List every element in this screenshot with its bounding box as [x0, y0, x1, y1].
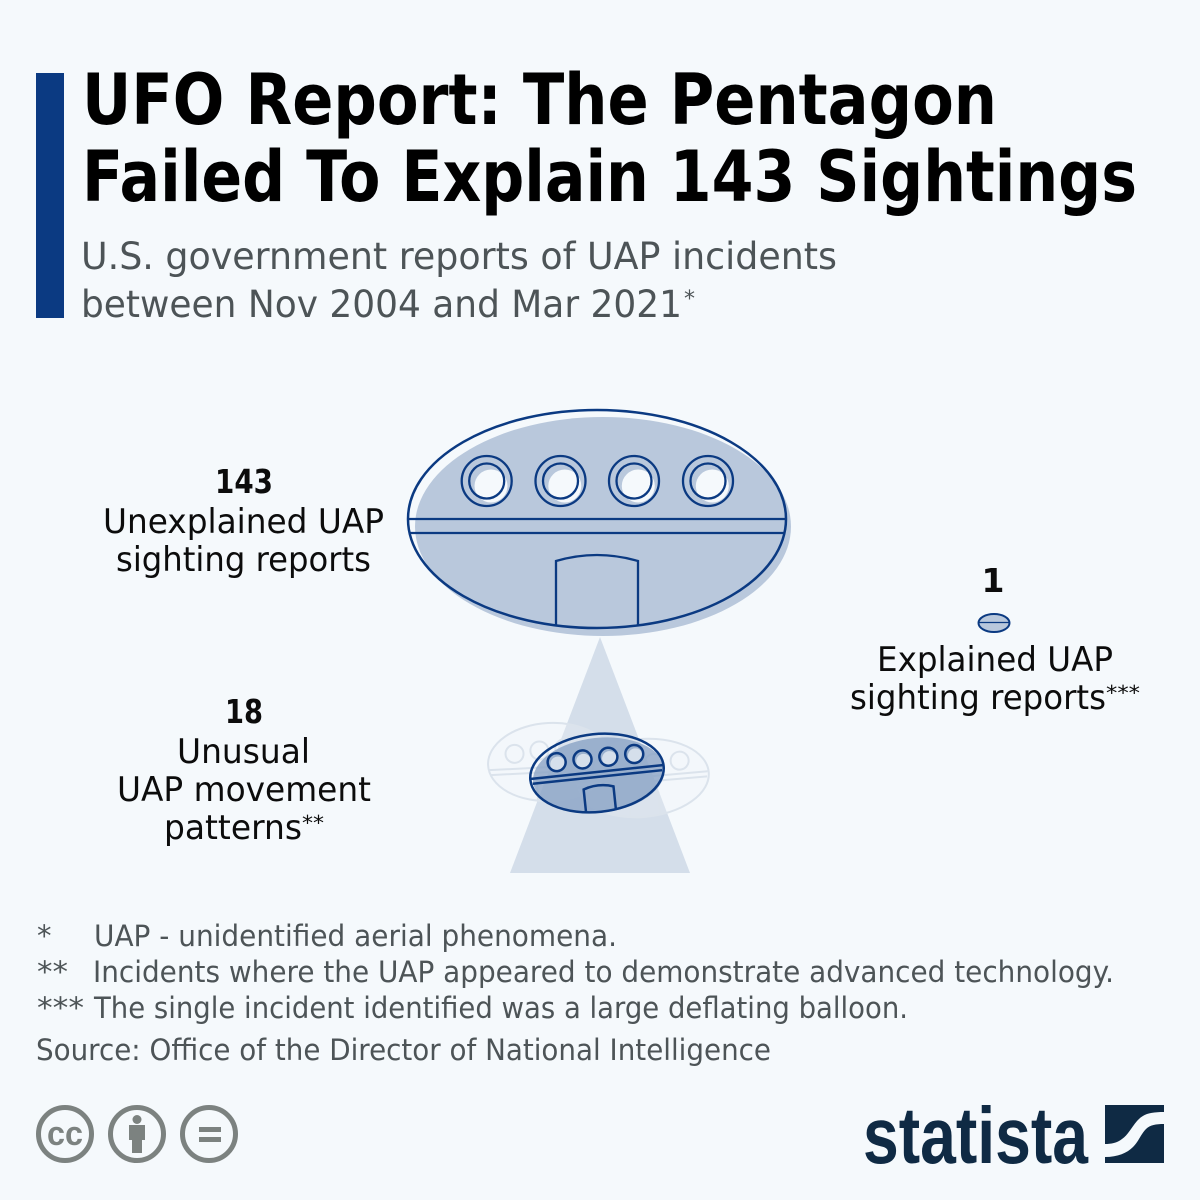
label: 1 explained: ***: [1106, 681, 1140, 705]
door: [556, 555, 638, 626]
tiny UFO: 1 explained: [978, 614, 1010, 632]
subtitle: [81, 235, 837, 326]
footnotes: *: [37, 919, 52, 953]
label: 1 explained: [850, 561, 1140, 718]
subtitle: U.S. government reports of UAP incidents: [81, 235, 837, 278]
title: [82, 59, 1137, 218]
label: 143 unexplained: [103, 462, 384, 580]
label: 143 unexplained: Unexplained UAP: [103, 502, 384, 542]
source: Source: Office of the Director of National Intelligence: [36, 1033, 771, 1067]
ghost UFO left: [486, 720, 614, 804]
icon: attribution: [110, 1108, 164, 1160]
title: UFO Report: The Pentagon: [82, 59, 997, 141]
icon: creative commons: cc: [47, 1115, 83, 1153]
label: 18 unusual: **: [302, 811, 324, 835]
subtitle: *: [684, 287, 695, 312]
label: 18 unusual: UAP movement: [117, 770, 371, 810]
label: 18 unusual: patterns: [164, 808, 302, 848]
footnotes: UAP - unidentified aerial phenomena.: [94, 919, 617, 953]
icon: statista square: [1105, 1105, 1164, 1163]
icon: no derivatives: [182, 1108, 236, 1160]
subtitle: between Nov 2004 and Mar 2021: [81, 283, 682, 326]
footnotes: ***: [37, 991, 84, 1025]
label: 143 unexplained: sighting reports: [116, 540, 371, 580]
label: 1 explained: sighting reports: [850, 678, 1106, 718]
logo: statista: statista: [863, 1091, 1088, 1180]
label: 143 unexplained: 143: [215, 462, 273, 501]
label: 18 unusual: Unusual: [177, 732, 310, 772]
ghost UFO right: [572, 733, 712, 823]
label: 1 explained: Explained UAP: [877, 640, 1113, 680]
small UFO: 18 unusual: [526, 727, 668, 820]
footnotes: [37, 919, 1114, 1025]
windows: [462, 456, 733, 506]
label: 18 unusual: 18: [225, 692, 263, 731]
footnotes: The single incident identified was a large deflating balloon.: [93, 991, 908, 1025]
large UFO: 143 unexplained: [408, 410, 791, 636]
footnotes: Incidents where the UAP appeared to demonstrate advanced technology.: [93, 955, 1114, 989]
label: 18 unusual: [117, 692, 371, 848]
beam: [510, 637, 690, 873]
accent bar: [36, 73, 64, 318]
icon: creative commons: [38, 1108, 92, 1160]
footnotes: **: [37, 955, 68, 989]
label: 1 explained: 1: [982, 561, 1004, 600]
